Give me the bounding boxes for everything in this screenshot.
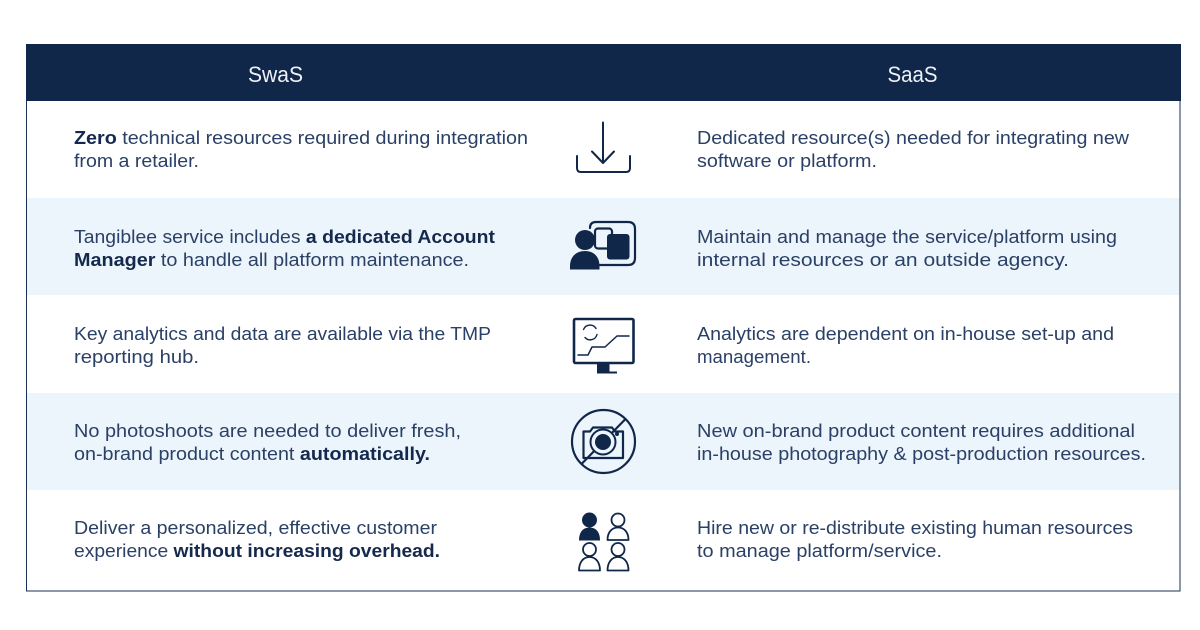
icon: team of four people — [579, 512, 628, 570]
SaaS text: Analytics are dependent on in-house set-up and — [697, 323, 1114, 344]
icon: account manager — [570, 222, 635, 270]
SwaS text: experience without increasing overhead. — [74, 540, 440, 561]
SwaS text — [74, 127, 528, 171]
SaaS text: in-house photography & post-production resources. — [697, 443, 1146, 464]
SaaS text: software or platform. — [697, 150, 877, 171]
icon: no photoshoot camera — [572, 410, 635, 473]
SaaS text: internal resources or an outside agency. — [697, 249, 1069, 270]
row 1: integration — [74, 122, 1130, 172]
SwaS text — [74, 517, 440, 561]
SaaS text: Dedicated resource(s) needed for integrating new — [697, 127, 1130, 148]
SwaS text: on-brand product content automatically. — [74, 443, 430, 464]
icon: download — [577, 122, 630, 172]
heading: SaaS: SaaS — [888, 62, 938, 87]
SaaS text — [697, 226, 1117, 270]
header bar — [26, 44, 1181, 101]
row 5: staffing — [74, 512, 1133, 570]
heading: SwaS: SwaS — [248, 62, 303, 87]
SaaS text — [697, 517, 1133, 561]
SaaS text — [697, 127, 1130, 171]
SaaS text: to manage platform/service. — [697, 540, 942, 561]
row backgrounds — [27, 198, 1180, 490]
SwaS text: reporting hub. — [74, 346, 199, 367]
SwaS text — [74, 323, 491, 367]
SwaS text: Manager to handle all platform maintenance. — [74, 249, 469, 270]
row 3: analytics — [74, 319, 1114, 374]
SwaS text: Deliver a personalized, effective customer — [74, 517, 437, 538]
SwaS text — [74, 226, 495, 270]
row 4: content — [74, 410, 1146, 473]
SwaS text: Key analytics and data are available via the TMP — [74, 323, 491, 344]
SwaS text: Zero technical resources required during integration — [74, 127, 528, 148]
SaaS text: New on-brand product content requires additional — [697, 420, 1135, 441]
SaaS text — [697, 420, 1146, 464]
SaaS text — [697, 323, 1114, 367]
SaaS text: Maintain and manage the service/platform using — [697, 226, 1117, 247]
SaaS text: management. — [697, 346, 811, 367]
icon: analytics monitor — [574, 319, 634, 374]
SwaS text: from a retailer. — [74, 150, 199, 171]
row 2: maintenance — [74, 222, 1117, 270]
SaaS text: Hire new or re-distribute existing human resources — [697, 517, 1133, 538]
SwaS text — [74, 420, 461, 464]
SwaS text: Tangiblee service includes a dedicated Account — [74, 226, 495, 247]
SwaS text: No photoshoots are needed to deliver fresh, — [74, 420, 461, 441]
